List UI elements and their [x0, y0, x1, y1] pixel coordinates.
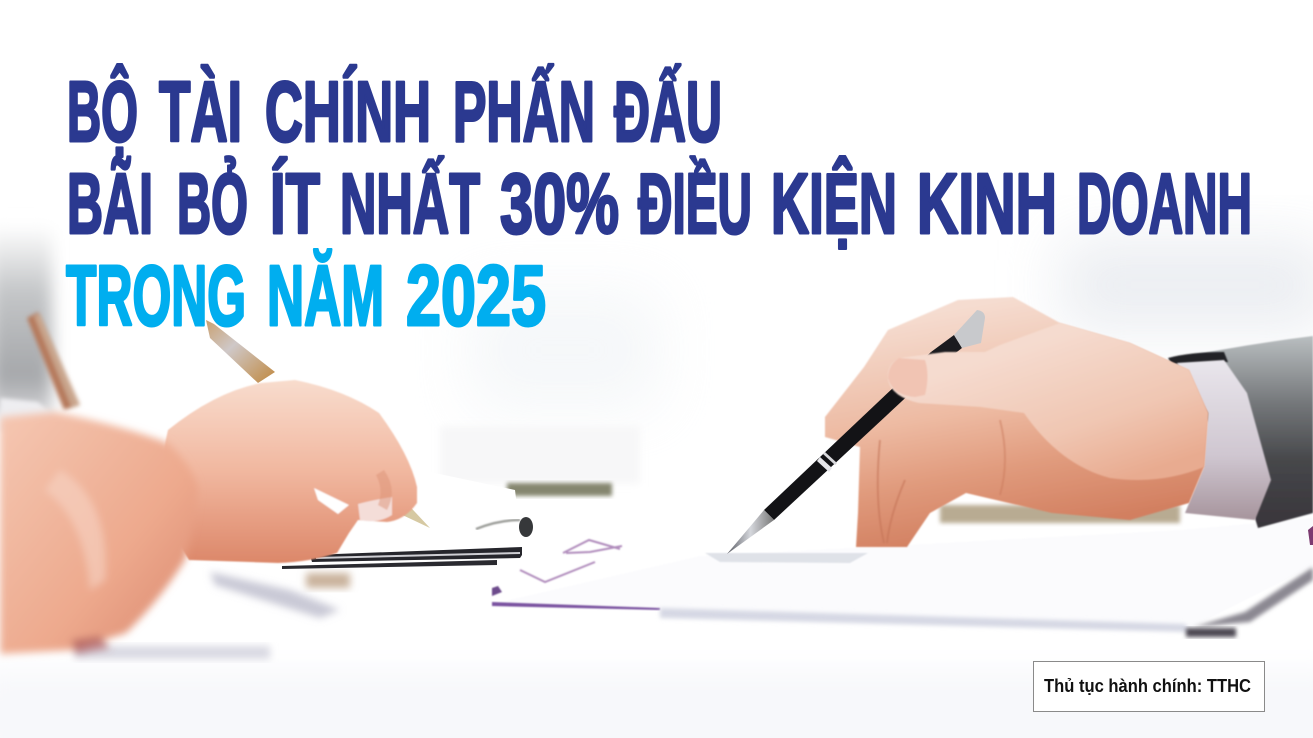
pointing hand: thumb and back of hand — [888, 323, 1208, 480]
title line 3: NĂM — [267, 249, 384, 344]
blurred office backdrop — [0, 225, 1313, 738]
left hand pen — [206, 320, 430, 528]
clipboard — [282, 472, 533, 569]
left sleeve — [0, 398, 58, 432]
writing hand — [162, 380, 417, 563]
glasses on the paper — [520, 540, 622, 582]
title line 1: TÀI — [159, 65, 242, 160]
title line 2: ÍT — [270, 157, 320, 252]
title line 2: KIỆN — [771, 156, 897, 252]
note: abbreviation — [1034, 662, 1264, 712]
title line 1: CHÍNH — [265, 65, 431, 160]
title line 2: BỎ — [177, 156, 248, 252]
back pen, blurred — [27, 312, 80, 410]
title line 2: 30% — [500, 157, 619, 252]
title line 1: ĐẤU — [614, 64, 722, 160]
title line 1 — [67, 64, 722, 160]
title line 2: ĐIỀU — [638, 156, 752, 252]
foreground blurred hand — [0, 412, 198, 654]
title line 2: BÃI — [67, 156, 153, 252]
black cuff edge — [1168, 352, 1228, 364]
pointing hand: palm and fingers — [825, 297, 1208, 547]
title line 2: NHẤT — [340, 156, 480, 252]
title line 1: PHẤN — [453, 64, 595, 160]
title line 2 — [67, 156, 1252, 252]
title line 3: 2025 — [406, 249, 546, 344]
title — [66, 64, 1252, 344]
note: abbreviation: Thủ tục hành chính: TTHC — [1044, 675, 1251, 696]
shirt cuff — [1177, 360, 1271, 520]
pointing pen — [727, 310, 985, 554]
title line 3 — [66, 249, 546, 344]
blurred papers and tray — [75, 426, 640, 659]
title line 3: TRONG — [66, 249, 246, 344]
title line 2: KINH — [917, 157, 1057, 252]
suit sleeve — [1168, 336, 1313, 528]
document sheet — [492, 505, 1313, 637]
title line 1: BỘ — [67, 64, 138, 160]
